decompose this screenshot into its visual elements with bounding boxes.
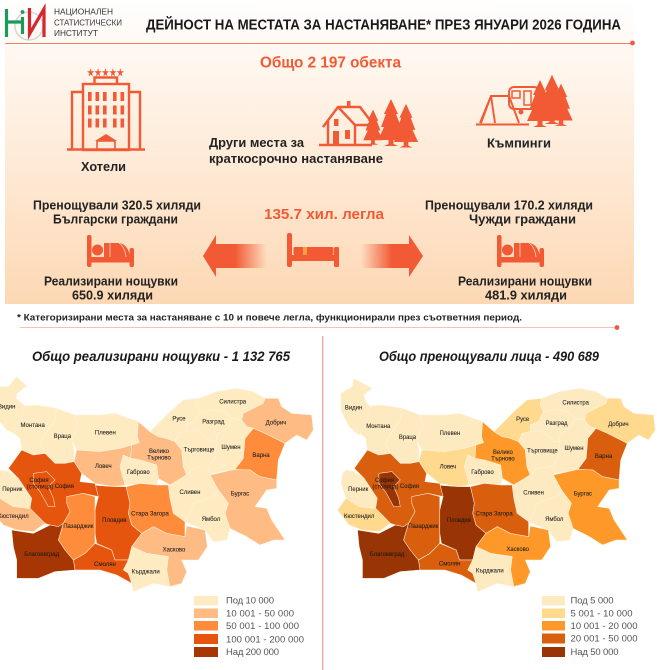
map: nights by district: Стара Загора [131, 511, 169, 517]
map: nights by district: Пазарджик [63, 524, 94, 530]
map: nights by district: Варна [252, 453, 270, 459]
map: persons by district: Пазарджик [408, 524, 439, 530]
heading: nights map: Общо реализирани нощувки - 1 132 765 [32, 348, 290, 364]
map: persons by district: Стара Загора [475, 511, 513, 517]
map: persons by district: Велико [493, 450, 513, 456]
map: nights by district: Кърджали [132, 570, 160, 576]
icon: hotel [67, 68, 145, 150]
map: nights by district: Враца [54, 434, 72, 440]
legend: nights: 100 001 - 200 000 [226, 634, 304, 646]
stats: foreign citizens: Чужди граждани [469, 212, 576, 226]
map: persons by district: Враца [399, 435, 417, 441]
stats: nights foreign: Реализирани нощувки [458, 274, 592, 288]
map: persons by district: Перник [348, 487, 369, 493]
stats: nights Bulgarian: 650.9 хиляди [72, 288, 153, 302]
map: persons by district: Ямбол [545, 517, 564, 523]
map: nights by district: Добрич [266, 421, 286, 427]
map: persons by district: Търговище [527, 449, 558, 455]
legend: nights [194, 596, 304, 658]
icon: tent, caravan and trees [476, 75, 573, 127]
legend: nights: 50 001 - 100 000 [226, 621, 299, 632]
logo: National Statistical Institute: ИНСТИТУТ [54, 29, 98, 38]
map: persons by district: Добрич [608, 422, 629, 428]
stats: nights Bulgarian [44, 274, 178, 302]
map: nights by district: Монтана [21, 423, 45, 429]
map: nights by district: Търговище [184, 447, 215, 453]
map: persons by district: София [400, 484, 419, 490]
map: nights by district: Шумен [221, 445, 241, 451]
map: nights by district: Търново [147, 456, 172, 462]
arrow: left [203, 235, 267, 277]
footnote: * Категоризирани места за настаняване с 10 и повече легла, функционирали през съответния период. [17, 312, 522, 324]
label: other short-stay places [209, 135, 383, 166]
map: nights by district: Пловдив [102, 518, 126, 524]
map: persons by district: Варна [595, 454, 613, 460]
legend: nights: Под 10 000 [226, 596, 274, 606]
map: nights by district: Смолян [94, 562, 116, 568]
map: persons by district: Пловдив [447, 518, 471, 524]
map: nights by district: Русе [172, 416, 186, 422]
map: persons by district: Сливен [523, 490, 544, 496]
map: nights by district: Ловеч [95, 464, 112, 470]
stats: nights foreign: 481.9 хиляди [485, 288, 567, 302]
map: nights by district: Разград [202, 420, 225, 426]
map: persons by district: Кърджали [476, 569, 504, 575]
map: nights by district: Сливен [180, 490, 200, 496]
map: persons by district: Хасково [506, 547, 530, 553]
label: hotels: Хотели [81, 159, 126, 174]
total objects heading: Общо 2 197 обекта [260, 54, 401, 72]
map: nights by district: Перник [2, 487, 23, 493]
stats: Bulgarian citizens [33, 198, 201, 226]
map: nights by district: Плевен [95, 431, 116, 437]
map: persons by district: София [375, 478, 394, 484]
stats: Bulgarian citizens: Пренощували 320.5 хиляди [33, 198, 201, 212]
map: nights by district [0, 377, 313, 592]
legend: persons: 5 001 - 10 000 [570, 608, 632, 620]
map: persons by district: Плевен [440, 431, 460, 437]
icon: house and trees [319, 99, 418, 148]
map: persons by district: Благоевград [370, 552, 405, 558]
legend: nights: Над 200 000 [226, 647, 279, 658]
title: ДЕЙНОСТ НА МЕСТАТА ЗА НАСТАНЯВАНЕ* ПРЕЗ ЯНУАРИ 2026 ГОДИНА [146, 16, 621, 34]
map: persons by district: Кюстендил [344, 514, 375, 520]
stats: nights foreign [458, 274, 592, 302]
stat: beds: 135.7 хил. легла [264, 206, 385, 223]
logo: National Statistical Institute: СТАТИСТИЧЕСКИ [54, 18, 122, 28]
map: persons by district: Монтана [366, 424, 391, 430]
label: other short-stay places: Други места за [209, 135, 305, 150]
map: persons by district: Смолян [439, 561, 460, 567]
stats: foreign citizens [425, 198, 593, 226]
legend: persons: Под 5 000 [570, 596, 614, 606]
map: nights by district: София [55, 484, 74, 490]
panel: header and summary background [5, 0, 634, 304]
label: other short-stay places: краткосрочно настаняване [209, 151, 383, 166]
map: persons by district: Ловеч [440, 464, 456, 470]
stats: nights Bulgarian: Реализирани нощувки [44, 274, 178, 288]
map: persons by district: Бургас [574, 491, 592, 497]
map: persons by district: Разград [546, 421, 568, 427]
map: persons by district: Видин [345, 406, 362, 412]
map: nights by district: Габрово [127, 470, 150, 476]
map: persons by district: (столица) [372, 485, 399, 491]
map: persons by district: Силистра [562, 401, 590, 407]
map: nights by district: Благоевград [24, 552, 60, 558]
map: nights by district: (столица) [27, 485, 53, 491]
map: persons by district: Търново [491, 456, 515, 462]
stats: Bulgarian citizens: Български граждани [53, 212, 178, 226]
legend: persons: 20 001 - 50 000 [570, 634, 638, 644]
stats: foreign citizens: Пренощували 170.2 хиляди [425, 198, 593, 212]
map: nights by district: Велико [149, 449, 170, 455]
map: persons by district [337, 378, 655, 592]
icon: hotel: ★★★★★ [87, 68, 124, 79]
icon: bed left [87, 235, 134, 267]
map: nights by district: Ямбол [202, 517, 221, 523]
logo: National Statistical Institute: НАЦИОНАЛЕН [54, 8, 113, 16]
map: nights by district: Хасково [163, 547, 186, 553]
map: persons by district: Русе [516, 417, 530, 423]
map: nights by district: Силистра [219, 399, 247, 405]
arrow: right [361, 235, 423, 277]
map: persons by district: Шумен [565, 446, 583, 452]
icon: bed right [497, 235, 544, 267]
map: persons by district: Габрово [471, 470, 494, 476]
map: nights by district: София [29, 478, 49, 484]
legend: nights: 10 001 - 50 000 [226, 608, 294, 620]
legend: persons: Над 50 000 [570, 647, 618, 658]
icon: central bed [287, 233, 339, 267]
map: nights by district: Бургас [231, 491, 249, 497]
legend: persons: 10 001 - 20 000 [570, 621, 638, 632]
legend: persons [542, 596, 638, 658]
label: campings: Къмпинги [487, 136, 551, 150]
logo: National Statistical Institute [6, 8, 122, 40]
heading: persons map: Общо пренощували лица - 490 689 [379, 348, 599, 364]
